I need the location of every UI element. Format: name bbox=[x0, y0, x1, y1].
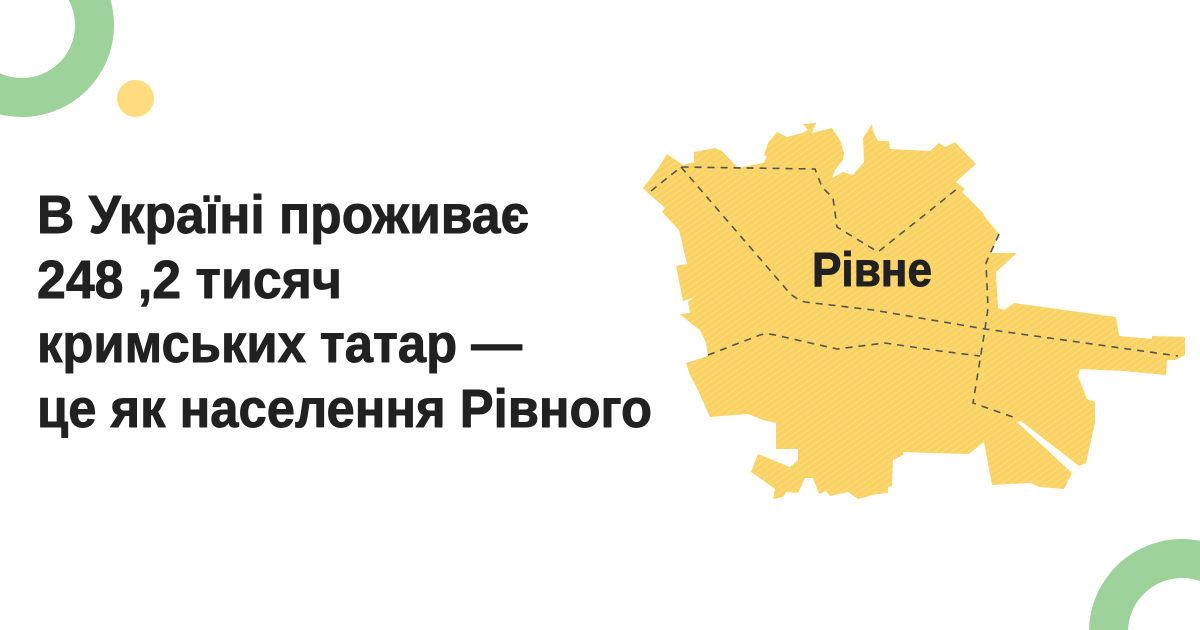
map: Rivne city bbox=[643, 123, 1185, 499]
heading: кримських татар — bbox=[37, 314, 522, 374]
map label: Рівне bbox=[812, 244, 932, 297]
district boundaries bbox=[651, 167, 1178, 417]
heading: це як населення Рівного bbox=[37, 379, 652, 439]
heading bbox=[37, 185, 652, 439]
heading: 248 ,2 тисяч bbox=[37, 250, 342, 310]
decorative dot: yellow bbox=[117, 80, 154, 117]
heading: В Україні проживає bbox=[37, 185, 529, 245]
decorative ring: top left bbox=[0, 0, 114, 117]
decorative ring: bottom right bbox=[1089, 539, 1200, 630]
map outline fill bbox=[643, 123, 1185, 499]
